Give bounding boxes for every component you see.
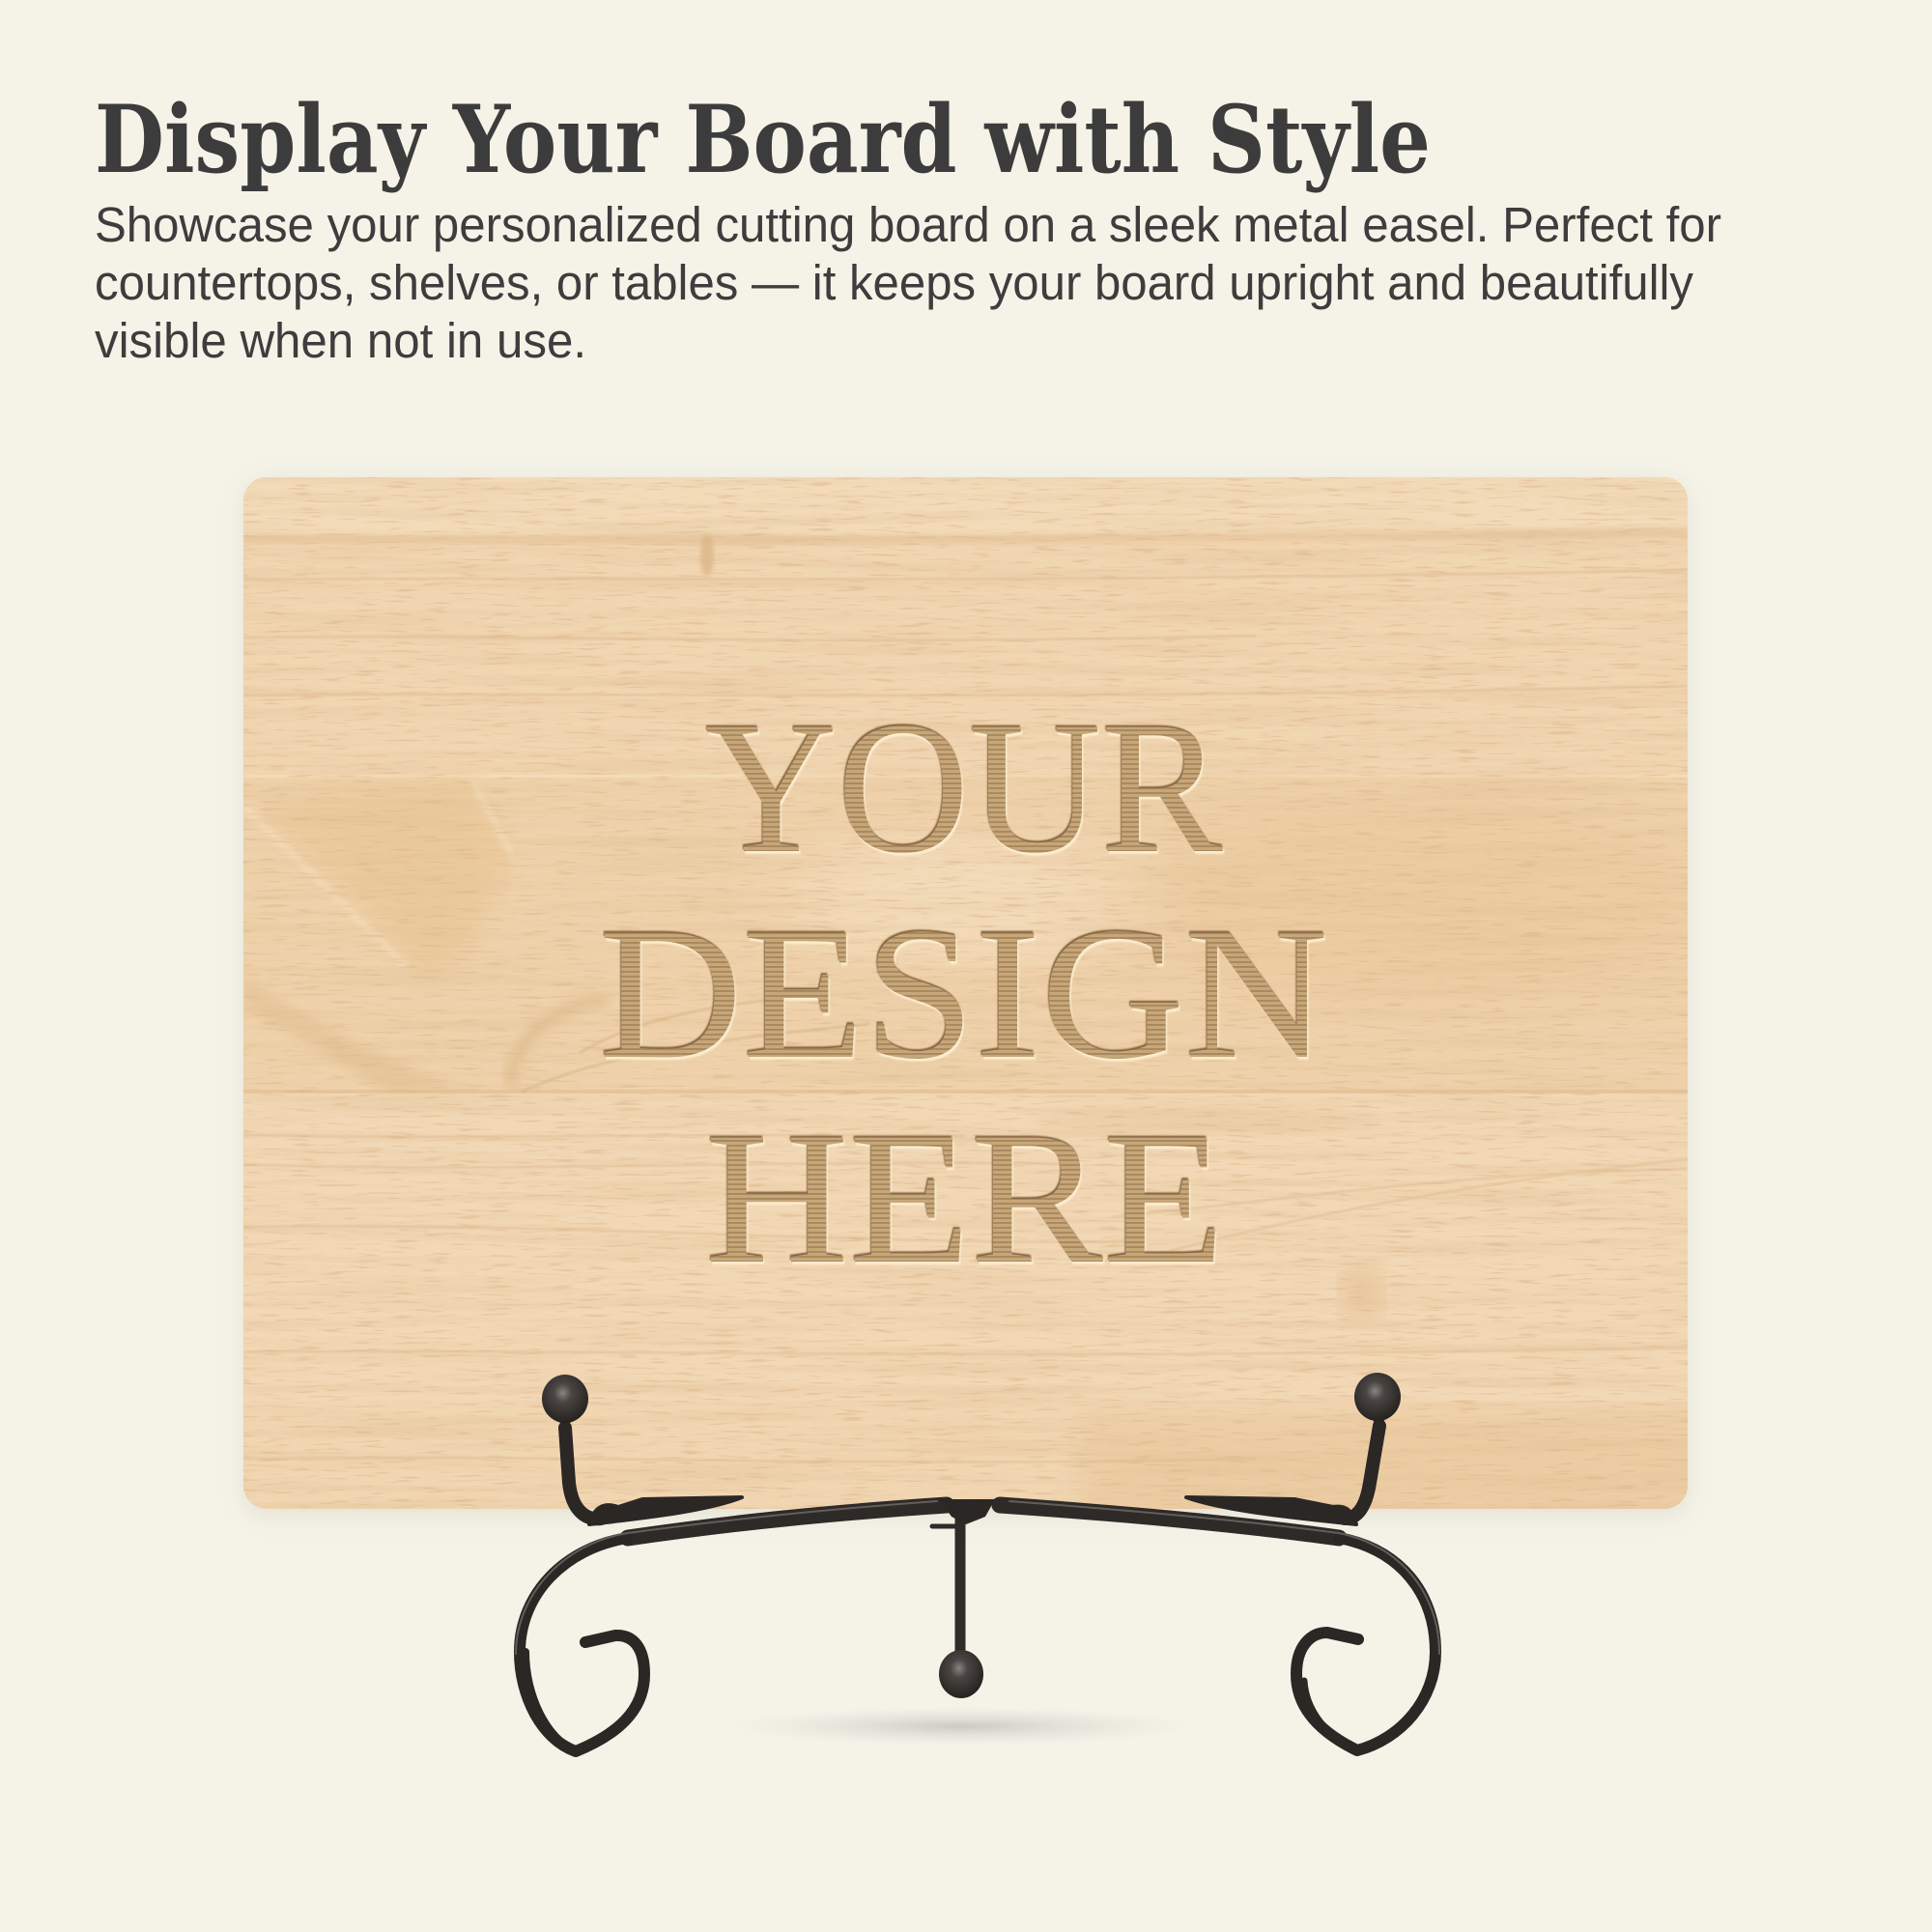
engraving dark edge: DESIGN bbox=[598, 887, 1327, 1096]
floor shadow bbox=[729, 1707, 1193, 1746]
engraved text: your design here bbox=[598, 681, 1329, 1306]
engraving fill: HERE bbox=[705, 1094, 1225, 1303]
engraving highlight: HERE bbox=[707, 1096, 1227, 1306]
description text: countertops, shelves, or tables — it keeps your board upright and beautifully bbox=[95, 255, 1693, 310]
icon: right support hook bbox=[1186, 1373, 1401, 1524]
engraving fill bbox=[599, 683, 1328, 1303]
title: Display Your Board with Style bbox=[95, 85, 1431, 194]
engraving fill: DESIGN bbox=[599, 889, 1328, 1098]
description text: Showcase your personalized cutting board on a sleek metal easel. Perfect for bbox=[95, 197, 1721, 252]
engraving fill: YOUR bbox=[705, 683, 1223, 893]
icon: left support hook bbox=[542, 1375, 742, 1524]
icon: center hinge and back leg bbox=[932, 1499, 995, 1698]
icon: right knob bbox=[1354, 1373, 1401, 1432]
icon: right scroll leg bbox=[1000, 1501, 1439, 1750]
engraving highlight: YOUR bbox=[707, 686, 1225, 895]
engraving highlight bbox=[601, 686, 1329, 1306]
wood grain bbox=[243, 477, 1688, 1509]
left swirl bbox=[270, 775, 506, 972]
grain lines bbox=[243, 570, 1688, 1463]
description text: visible when not in use. bbox=[95, 313, 586, 368]
infographic canvas bbox=[95, 100, 1721, 1757]
wood planks and tone patches bbox=[243, 477, 1719, 1528]
wooden cutting board bbox=[243, 477, 1719, 1528]
engraving dark edge bbox=[598, 681, 1327, 1301]
board drop shadow bbox=[243, 481, 1688, 1517]
icon: left scroll leg bbox=[516, 1501, 947, 1751]
engraving dark edge: HERE bbox=[704, 1092, 1224, 1301]
metal easel bbox=[516, 1373, 1439, 1751]
engraving highlight: DESIGN bbox=[601, 892, 1329, 1101]
description text bbox=[95, 197, 1721, 368]
icon: left knob bbox=[542, 1375, 588, 1432]
engraving dark edge: YOUR bbox=[704, 681, 1222, 891]
